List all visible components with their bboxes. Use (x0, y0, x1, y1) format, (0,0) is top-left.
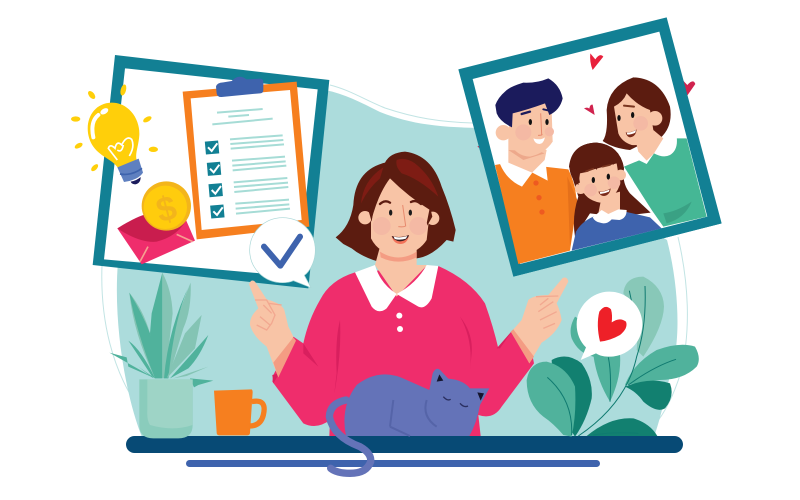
neck shadow (380, 252, 417, 262)
woman (603, 77, 707, 227)
man (495, 78, 577, 264)
nose (398, 205, 406, 227)
hair highlights (361, 159, 438, 203)
head (358, 159, 439, 256)
plant and mug (109, 273, 264, 438)
plant (527, 277, 699, 437)
neck (375, 247, 427, 297)
sweater folds (272, 317, 513, 393)
speech bubble: check mark (250, 218, 315, 288)
right panel: family photo (458, 17, 722, 277)
mouth interior (392, 235, 409, 241)
frame (93, 55, 329, 288)
brows (380, 201, 421, 204)
frame interior (473, 32, 707, 264)
heart behind frame left (477, 140, 493, 157)
mouth (392, 235, 409, 244)
hair (336, 152, 456, 262)
orange mug (214, 389, 264, 435)
dollar sign: $ (152, 189, 181, 230)
icon: coin (142, 181, 191, 231)
collar (355, 265, 438, 311)
woman (249, 152, 568, 473)
heart large (590, 53, 603, 70)
icon: light bulb (71, 84, 158, 184)
sweater (272, 266, 534, 436)
background blob outline (102, 85, 687, 430)
frame bottom band (513, 217, 722, 277)
left panel: checklist and ideas (71, 55, 329, 288)
heart small (584, 105, 595, 115)
lower bar (186, 460, 600, 467)
right plant and heart bubble (527, 277, 699, 437)
speech bubble: heart (577, 292, 642, 360)
table (126, 436, 683, 453)
potted plant (109, 273, 213, 438)
cheeks (373, 217, 427, 235)
clipboard (183, 77, 309, 239)
face (371, 178, 430, 256)
girl (569, 143, 662, 251)
ears (358, 211, 439, 225)
background blob (117, 90, 677, 437)
icon: envelope (117, 215, 195, 264)
hair wisps (368, 203, 432, 228)
left hand (249, 280, 296, 377)
right hand (511, 277, 568, 363)
cat (329, 369, 489, 473)
buttons (396, 313, 403, 332)
eyes (389, 210, 412, 216)
teeth (394, 236, 407, 240)
frame (458, 17, 722, 277)
heart behind frame right (682, 79, 695, 97)
frame interior (104, 68, 318, 277)
